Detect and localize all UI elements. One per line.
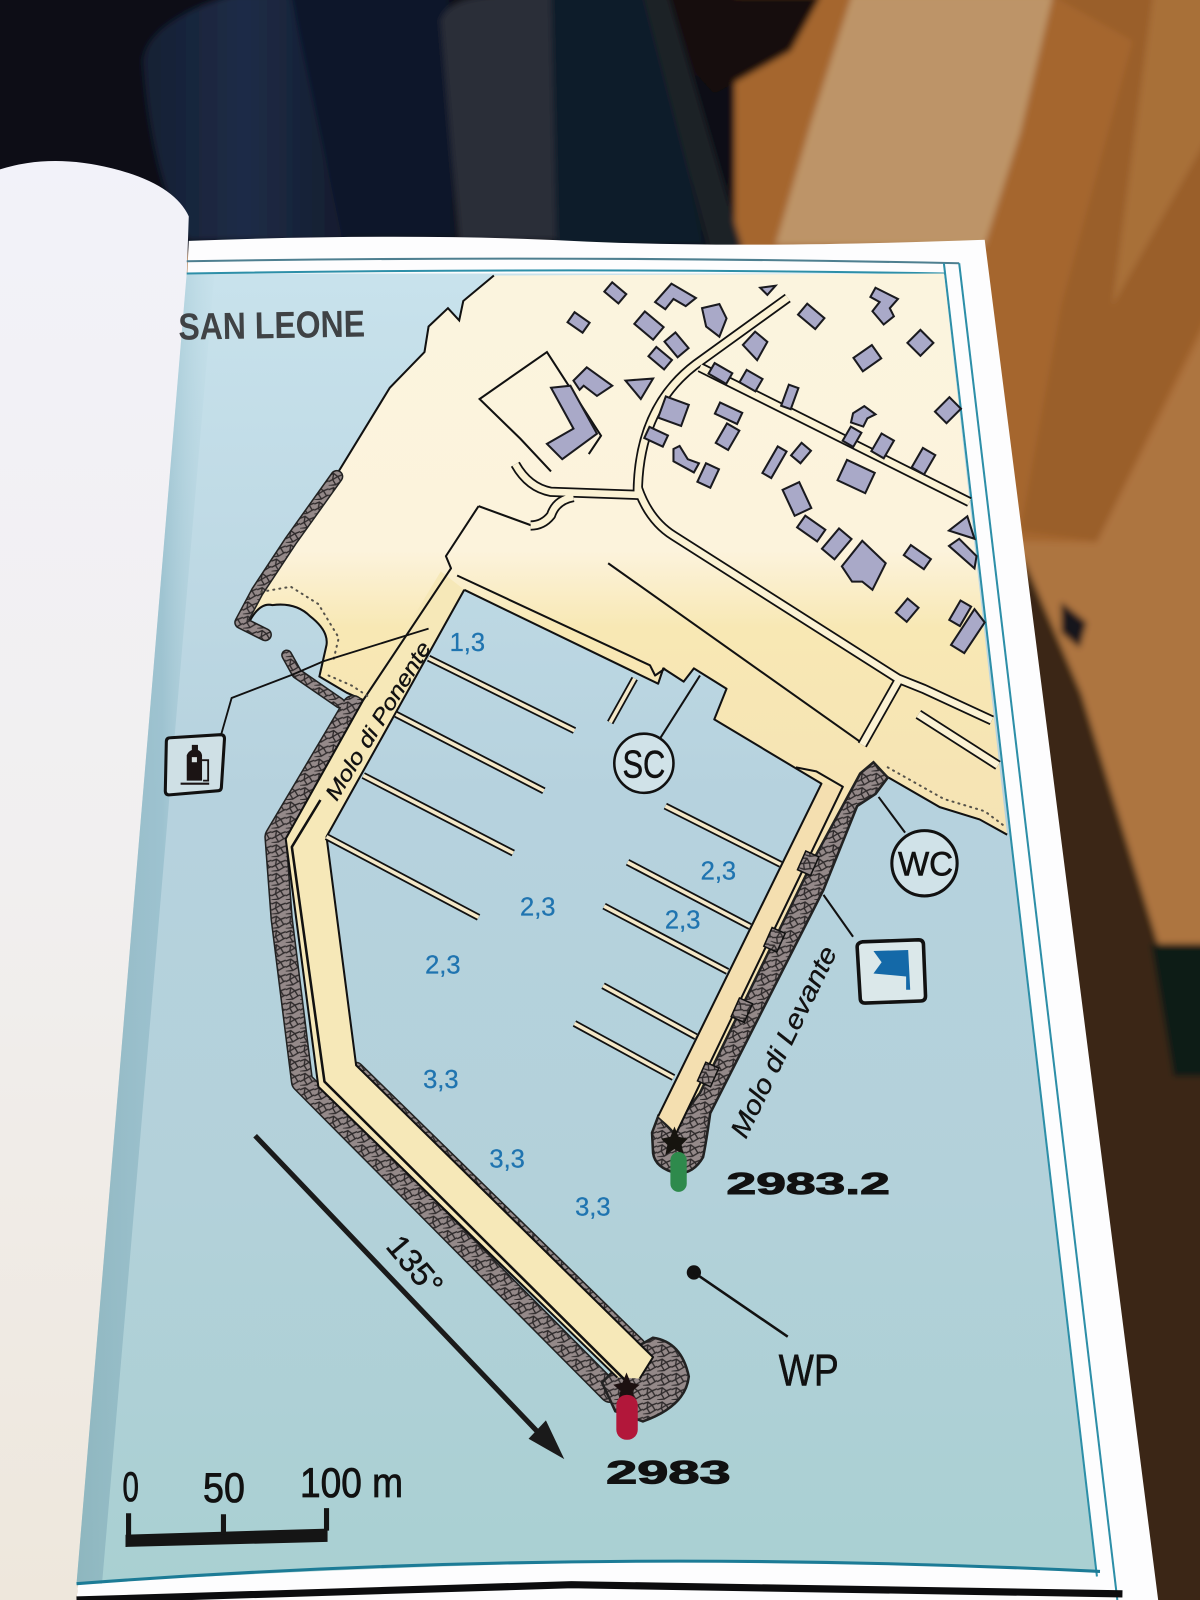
building plot outline bbox=[480, 352, 601, 471]
scale bar bbox=[122, 1459, 403, 1547]
sailing club marker bbox=[614, 676, 700, 793]
bearing arrow 135 degrees bbox=[255, 1136, 564, 1459]
waypoint marker: WP bbox=[779, 1345, 839, 1396]
left curled page bbox=[0, 161, 189, 1600]
shoreline stipple bbox=[261, 587, 1005, 827]
depth soundings: 2,3 bbox=[665, 907, 700, 935]
fuel callout bbox=[165, 629, 429, 795]
depth soundings: 2,3 bbox=[520, 893, 555, 921]
spine shadow on water bbox=[77, 273, 214, 1584]
sailing club marker: SC bbox=[622, 744, 665, 787]
road network bbox=[515, 298, 998, 765]
label: Molo di Ponente: Molo di Ponente bbox=[321, 637, 436, 805]
flag callout bbox=[823, 895, 926, 1003]
light number 2983.2: 2983.2 bbox=[727, 1167, 890, 1201]
light number 2983: 2983 bbox=[606, 1454, 731, 1491]
scale bar: 0 bbox=[122, 1463, 139, 1510]
breakwater rubble east bbox=[652, 762, 888, 1173]
depth soundings: 3,3 bbox=[489, 1145, 525, 1173]
water background bbox=[77, 273, 1097, 1584]
WC marker: WC bbox=[898, 846, 953, 884]
waypoint marker bbox=[687, 1265, 839, 1396]
depth soundings: 1,3 bbox=[450, 629, 485, 657]
label: Molo di Levante: Molo di Levante bbox=[724, 941, 843, 1142]
depth soundings bbox=[423, 629, 736, 1221]
depth soundings: 2,3 bbox=[701, 858, 736, 886]
title: SAN LEONE bbox=[178, 303, 365, 348]
mole cream decks bbox=[286, 571, 842, 1379]
depth soundings: 2,3 bbox=[425, 951, 461, 979]
buildings bbox=[547, 282, 985, 653]
depth soundings: 3,3 bbox=[423, 1066, 459, 1094]
WC marker bbox=[879, 797, 957, 896]
scale bar: 50 bbox=[203, 1464, 245, 1511]
bearing arrow 135 degrees: 135° bbox=[379, 1228, 451, 1303]
east light: green bbox=[661, 1127, 688, 1192]
east mole small structures bbox=[697, 851, 819, 1087]
depth soundings: 3,3 bbox=[575, 1193, 611, 1221]
quay and mole outlines bbox=[286, 506, 860, 1380]
coast outline bbox=[250, 276, 1007, 835]
west light: red bbox=[613, 1372, 640, 1440]
floating pontoons bbox=[327, 658, 781, 1078]
land and moles bbox=[250, 273, 1007, 1379]
frame lines bbox=[77, 259, 1122, 1600]
rubble breakwaters bbox=[241, 477, 638, 1392]
scale bar: 100 m bbox=[300, 1459, 403, 1506]
map page sheet bbox=[77, 237, 1158, 1600]
mole head rubble west bbox=[602, 1338, 689, 1421]
